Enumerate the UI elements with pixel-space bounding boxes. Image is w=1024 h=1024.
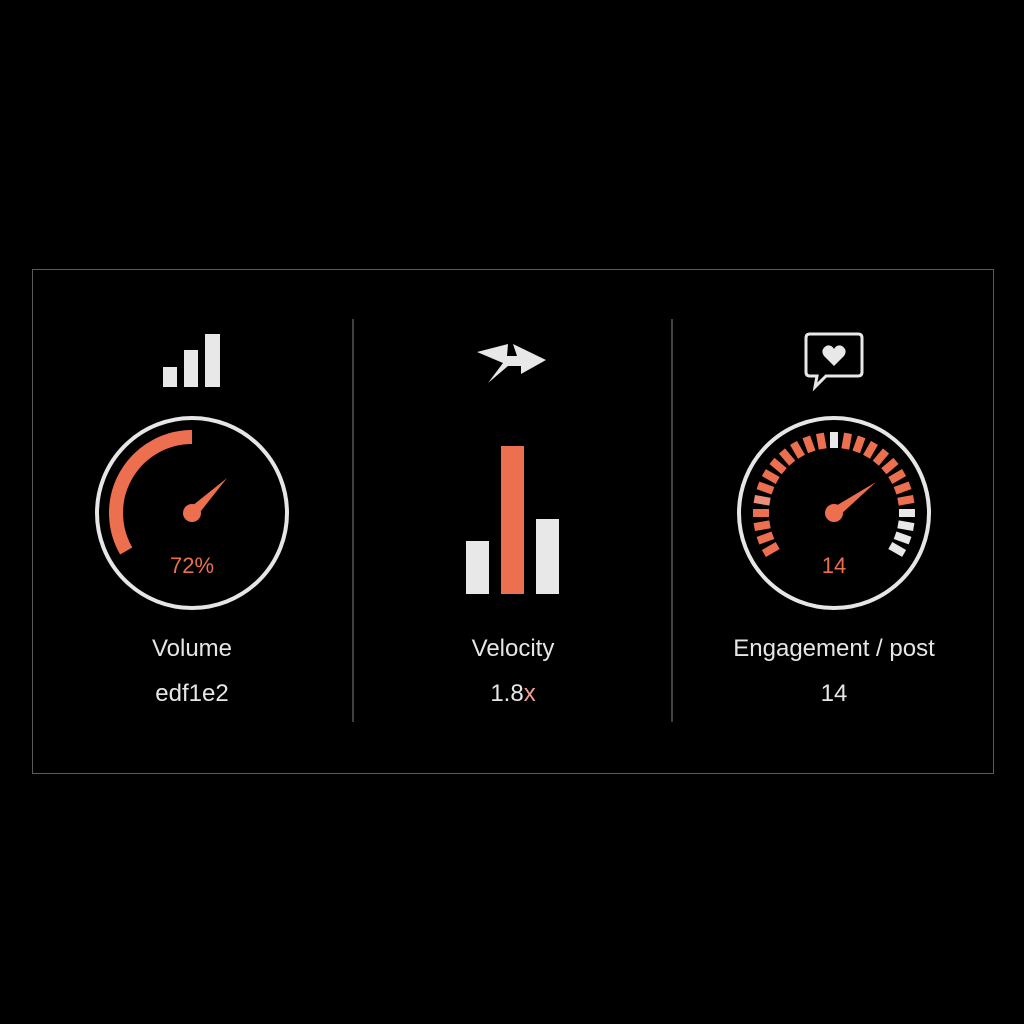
- value: velocity: 1.8x: [490, 680, 536, 707]
- value: volume: edf1e2: [155, 680, 229, 707]
- gauge: volume: 72%: [170, 553, 214, 578]
- label: volume: Volume: [152, 635, 232, 662]
- icon: heart speech bubble: [806, 334, 862, 387]
- bar chart: velocity: [466, 446, 559, 594]
- gauge: engagement: 14: [822, 553, 846, 578]
- value: engagement: 14: [821, 680, 847, 707]
- label: engagement: Engagement / post: [733, 635, 935, 662]
- label: velocity: Velocity: [472, 635, 554, 662]
- icon: signal bars: [163, 334, 220, 387]
- icon: arrow: [477, 344, 546, 383]
- infographic frame: [32, 269, 994, 774]
- gauge: volume: [97, 418, 287, 608]
- gauge: engagement: [739, 418, 929, 608]
